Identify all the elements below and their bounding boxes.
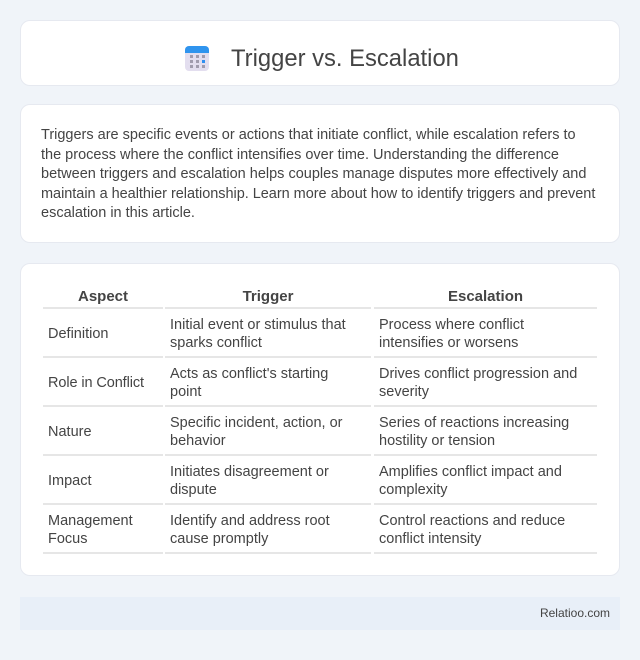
row: definition: Definition bbox=[48, 326, 108, 342]
row: definition: intensifies or worsens bbox=[379, 335, 518, 351]
row: definition: Process where conflict bbox=[379, 317, 524, 333]
row: management focus: conflict intensity bbox=[379, 531, 481, 547]
row: management focus: Management bbox=[48, 513, 133, 529]
row: impact: Impact bbox=[48, 473, 92, 489]
intro text bbox=[41, 127, 596, 221]
column headers: Trigger bbox=[243, 288, 293, 305]
row: role in conflict bbox=[48, 366, 577, 400]
column headers bbox=[78, 288, 523, 305]
panel: introduction bbox=[20, 104, 620, 243]
row: role in conflict: Drives conflict progression and bbox=[379, 366, 577, 382]
row: management focus: cause promptly bbox=[170, 531, 268, 547]
row: role in conflict: Role in Conflict bbox=[48, 375, 144, 391]
row: impact: dispute bbox=[170, 482, 217, 498]
row: role in conflict: Acts as conflict's starting bbox=[170, 366, 328, 382]
row: nature: behavior bbox=[170, 433, 226, 449]
row: impact: complexity bbox=[379, 482, 448, 498]
row: role in conflict: severity bbox=[379, 384, 429, 400]
row: nature: Specific incident, action, or bbox=[170, 415, 342, 431]
row: nature: Series of reactions increasing bbox=[379, 415, 569, 431]
intro text: maintain a healthier relationship. Learn more about how to identify triggers and prevent bbox=[41, 186, 595, 202]
row: nature bbox=[48, 415, 569, 449]
row: definition: sparks conflict bbox=[170, 335, 262, 351]
row: management focus: Control reactions and reduce bbox=[379, 513, 565, 529]
column headers: Aspect bbox=[78, 288, 128, 305]
row: impact bbox=[48, 464, 562, 498]
icon: calendar bbox=[185, 46, 209, 71]
intro text: Triggers are specific events or actions that initiate conflict, while escalation refers to bbox=[41, 127, 576, 143]
row: nature: Nature bbox=[48, 424, 92, 440]
title: Trigger vs. Escalation bbox=[231, 45, 459, 72]
footer bar bbox=[20, 597, 620, 630]
row: nature: hostility or tension bbox=[379, 433, 495, 449]
row: impact: Initiates disagreement or bbox=[170, 464, 329, 480]
row: definition: Initial event or stimulus that bbox=[170, 317, 346, 333]
row: management focus: Identify and address root bbox=[170, 513, 330, 529]
row: management focus bbox=[48, 513, 565, 547]
intro text: escalation in this article. bbox=[41, 205, 195, 221]
intro text: the process where the conflict intensifies over time. Understanding the difference bbox=[41, 147, 559, 163]
row: management focus: Focus bbox=[48, 531, 88, 547]
footer text: Relatioo.com bbox=[540, 606, 610, 620]
panel: comparison table bbox=[20, 263, 620, 576]
comparison table bbox=[43, 288, 597, 554]
row: impact: Amplifies conflict impact and bbox=[379, 464, 562, 480]
panel: title card bbox=[20, 20, 620, 86]
row: definition bbox=[48, 317, 524, 351]
row: role in conflict: point bbox=[170, 384, 201, 400]
column headers: Escalation bbox=[448, 288, 523, 305]
intro text: between triggers and escalation helps couples manage disputes more effectively and bbox=[41, 166, 586, 182]
